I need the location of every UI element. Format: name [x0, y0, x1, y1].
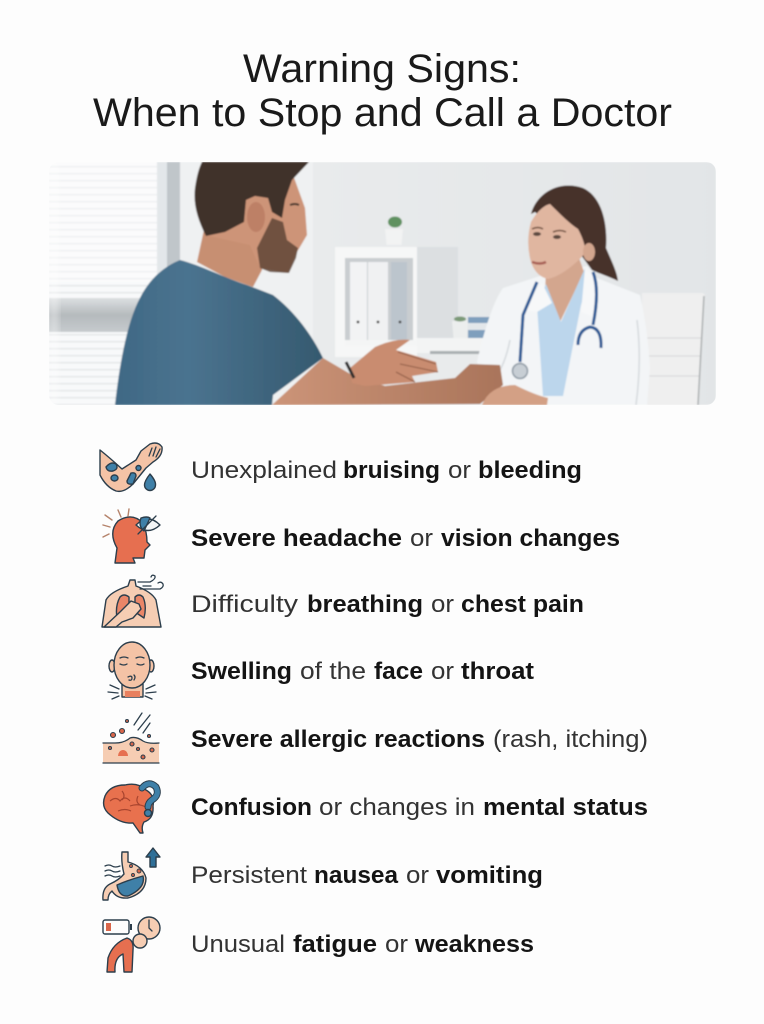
man's shirt	[115, 260, 323, 405]
label: fatigue or weakness	[191, 931, 534, 958]
doctor shirt	[537, 268, 590, 396]
label: nausea or vomiting: vomiting	[436, 862, 543, 889]
icon: swollen face	[108, 642, 156, 699]
row 2	[103, 509, 620, 563]
doctor face	[528, 204, 586, 279]
label: confusion: Confusion	[191, 794, 312, 821]
label: swelling: face	[374, 658, 423, 685]
label: breathing or chest pain	[191, 591, 584, 618]
label: confusion	[191, 794, 648, 821]
label: bruising or bleeding: Unexplained	[191, 457, 337, 484]
window with blinds	[49, 162, 212, 405]
label: breathing or chest pain: Difficulty	[191, 591, 298, 618]
label: nausea or vomiting: or	[406, 862, 429, 889]
icon: stomach with arrow	[103, 848, 160, 900]
shelf unit	[335, 247, 482, 357]
plant on shelf	[385, 216, 403, 245]
photo white edge fade	[50, 298, 60, 332]
label: breathing or chest pain: or	[431, 591, 454, 618]
small plant and books	[452, 316, 491, 338]
label: nausea or vomiting: Persistent	[191, 862, 307, 889]
doctor's clasped hands	[482, 385, 548, 405]
label: headache or vision	[191, 525, 620, 552]
row 5	[103, 713, 648, 763]
label: allergic reactions	[191, 726, 648, 753]
icon: skin rash	[103, 713, 159, 763]
icon: low battery, clock and tired person	[103, 917, 160, 972]
title	[93, 47, 672, 135]
label: bruising or bleeding	[191, 457, 582, 484]
label: swelling	[191, 658, 534, 685]
icon: chest and lungs	[102, 575, 163, 627]
label: headache or vision: or	[410, 525, 433, 552]
label: swelling: Swelling	[191, 658, 292, 685]
row 3	[102, 575, 584, 627]
row 4	[108, 642, 534, 699]
room wall	[312, 162, 716, 405]
label: fatigue or weakness: Unusual	[191, 931, 285, 958]
photo: patient talking to doctor	[49, 162, 716, 405]
row 1	[100, 443, 582, 491]
office chair	[642, 293, 705, 405]
label: bruising or bleeding: bruising	[343, 457, 440, 484]
stethoscope	[520, 272, 601, 362]
label: nausea or vomiting: nausea	[314, 862, 399, 889]
label: swelling: throat	[461, 658, 534, 685]
label: swelling: or	[431, 658, 454, 685]
label: allergic reactions: (rash, itching)	[493, 726, 648, 753]
label: fatigue or weakness: weakness	[414, 931, 534, 958]
label: fatigue or weakness: fatigue	[293, 931, 377, 958]
doctor neck	[545, 255, 584, 322]
icon: brain with question mark	[104, 784, 157, 833]
man's neck	[197, 225, 262, 287]
title: When to Stop and Call a Doctor	[93, 91, 672, 135]
label: nausea or vomiting	[191, 862, 543, 889]
label: headache or vision: vision changes	[441, 525, 620, 552]
label: fatigue or weakness: or	[385, 931, 408, 958]
label: headache or vision: Severe headache	[191, 525, 402, 552]
label: breathing or chest pain: chest pain	[461, 591, 584, 618]
doctor	[477, 186, 650, 405]
label: breathing or chest pain: breathing	[307, 591, 423, 618]
icon: head with eye	[103, 509, 160, 563]
man's arms and hands	[272, 340, 503, 405]
label: bruising or bleeding: bleeding	[478, 457, 582, 484]
title: Warning Signs:	[243, 47, 521, 91]
row 7	[103, 848, 543, 900]
label: confusion: or changes in	[319, 794, 475, 821]
man's head	[195, 162, 309, 273]
row 6	[104, 784, 648, 833]
label: bruising or bleeding: or	[448, 457, 471, 484]
row 8	[103, 917, 534, 972]
doctor hair and ponytail	[531, 186, 618, 281]
label: allergic reactions: Severe allergic reactions	[191, 726, 485, 753]
label: swelling: of the	[300, 658, 366, 685]
icon: blood drop	[144, 474, 156, 491]
label: confusion: mental status	[483, 794, 648, 821]
icon: bruised arm	[100, 443, 162, 491]
